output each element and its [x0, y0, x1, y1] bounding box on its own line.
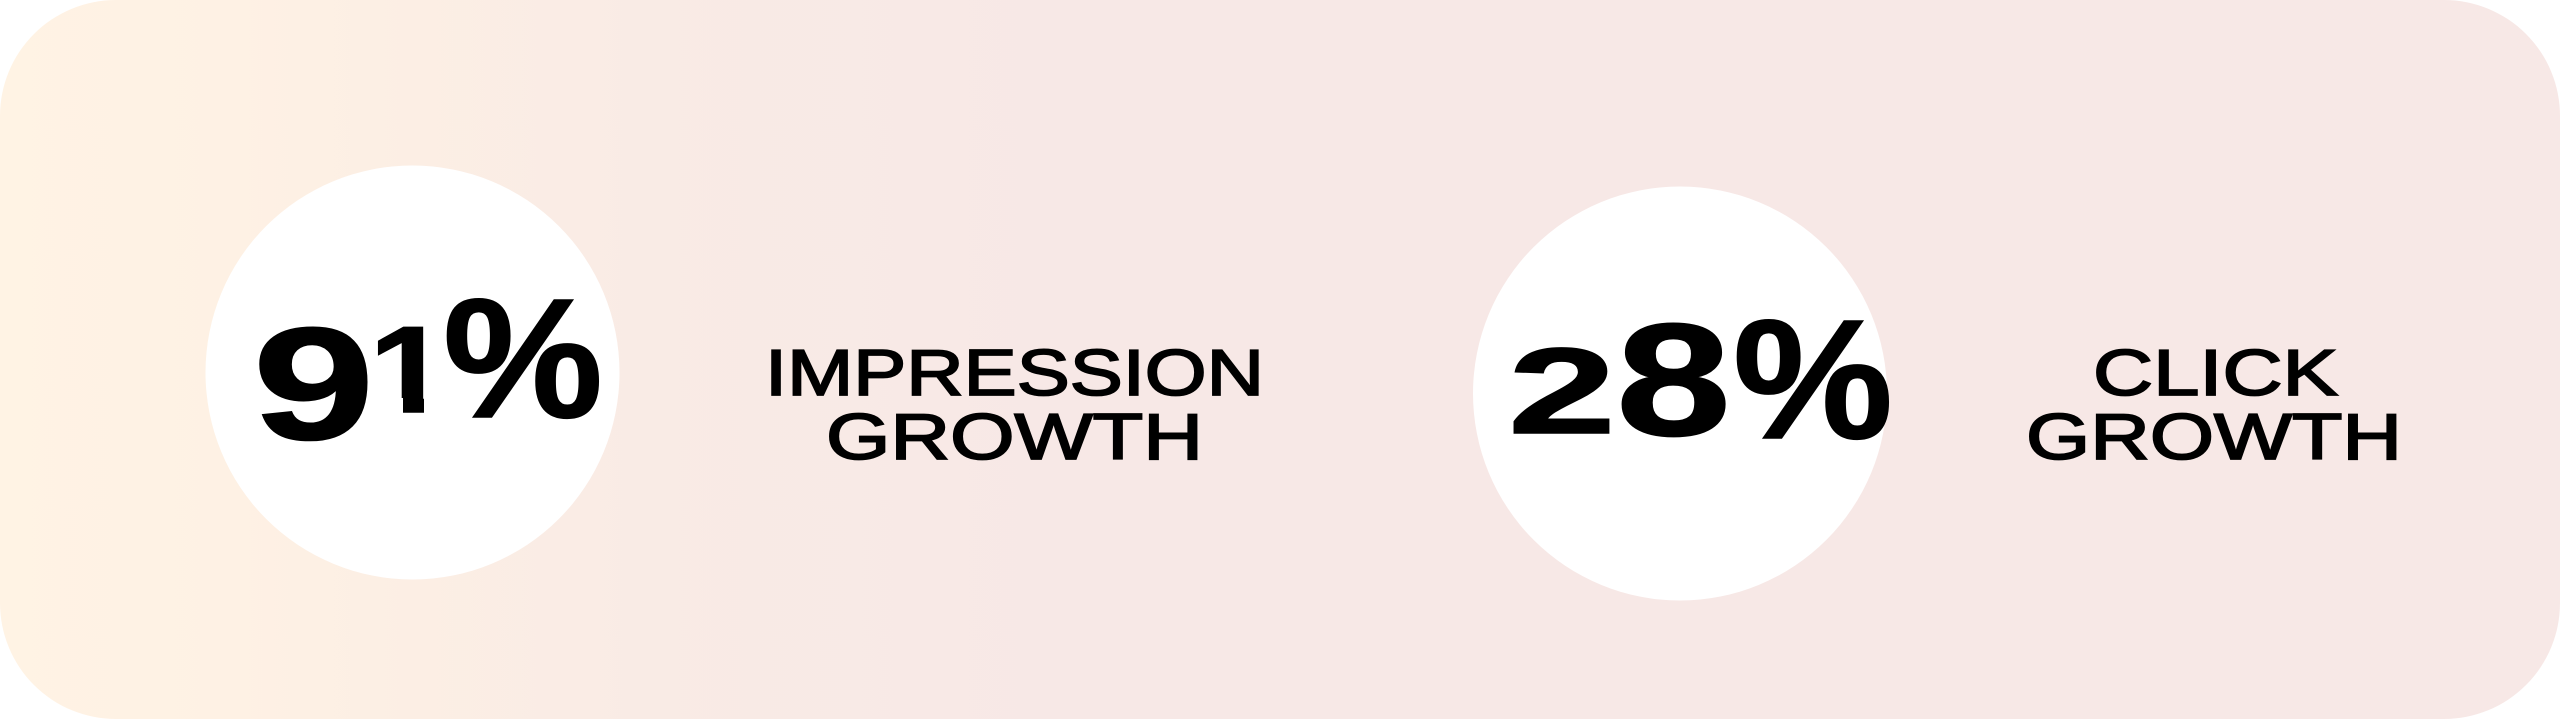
label: impression growth: GROWTH	[826, 400, 1203, 473]
big number: 91%: %	[443, 264, 603, 454]
big number: 28%	[1508, 285, 1893, 475]
big number: 28%: 2	[1508, 323, 1616, 459]
circle: 91% backdrop	[206, 166, 620, 580]
big number: 91%: 1	[369, 302, 449, 439]
label: click growth: CLICK	[2093, 336, 2338, 409]
big number: 28%: %	[1733, 285, 1893, 475]
label: impression growth: IMPRESSION	[765, 336, 1264, 409]
circle: 28% backdrop	[1473, 186, 1887, 600]
label: click growth: GROWTH	[2026, 400, 2402, 473]
big number: 91%	[259, 298, 600, 442]
stat: click growth	[1473, 186, 2402, 600]
label: click growth	[2026, 336, 2402, 473]
label: impression growth	[765, 336, 1264, 473]
big number: 28%: 8	[1616, 290, 1731, 469]
big number: 91%: 9	[253, 294, 375, 473]
stat: impression growth	[206, 166, 1264, 580]
